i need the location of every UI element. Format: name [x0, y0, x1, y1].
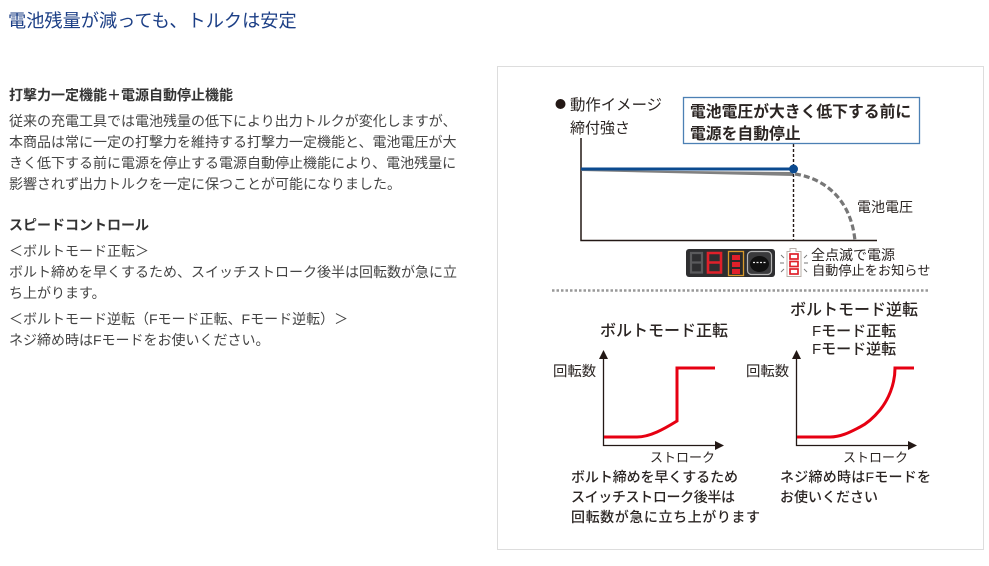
heading: ボルトモード逆転	[790, 301, 918, 319]
top chart: tightening force	[556, 96, 913, 241]
rpm curve	[604, 368, 715, 437]
text block: speed control description	[9, 243, 457, 348]
x label: ストローク	[843, 450, 908, 465]
legend heading: 動作イメージ	[570, 96, 662, 114]
dotted divider	[552, 289, 928, 292]
notice text: 自動停止をお知らせ	[812, 262, 930, 278]
digit lit	[708, 253, 721, 272]
caption: bolt mode forward: ボルト締めを早くするため	[571, 469, 738, 485]
mode button	[748, 252, 772, 274]
title: 電池残量が減っても、トルクは安定	[8, 11, 297, 31]
callout: auto power off: 電源を自動停止	[690, 125, 801, 143]
dashed voltage curve	[795, 174, 855, 241]
icon: tool display panel	[686, 249, 775, 277]
voltage label: 電池電圧	[857, 199, 913, 215]
y label: 回転数	[746, 363, 789, 380]
chart: bolt mode forward	[553, 322, 728, 465]
caption: reverse mode: お使いください	[780, 489, 878, 505]
text block: speed control description: ネジ締め時はFモードをお使いください。	[9, 332, 270, 348]
arrow up	[792, 350, 801, 359]
panel: diagrams	[497, 66, 984, 550]
notice text	[811, 247, 930, 278]
text block: impact force description: きく低下する前に電源を停止する電源自動停止機能により、電池残量に	[9, 155, 456, 171]
blue torque line	[581, 168, 793, 170]
text block: speed control description: ＜ボルトモード正転＞	[9, 243, 149, 259]
heading	[790, 301, 918, 358]
heading: Fモード逆転	[812, 341, 896, 358]
arrow right	[908, 441, 917, 450]
callout: auto power off: 電池電圧が大きく低下する前に	[690, 102, 911, 121]
text block: impact force description: 従来の充電工具では電池残量の低下により出力トルクが変化しますが、	[9, 113, 456, 129]
arrow right	[715, 441, 724, 450]
icon: flashing battery	[780, 248, 808, 276]
end point	[789, 164, 798, 174]
dotted vertical line	[792, 144, 794, 241]
axes	[796, 356, 909, 446]
text block: impact force description	[9, 113, 456, 192]
heading: impact force and auto stop: 打撃力一定機能＋電源自動停止機能	[9, 87, 233, 103]
text block: speed control description: ち上がります。	[9, 285, 106, 301]
heading: Fモード正転	[812, 323, 896, 340]
axes	[604, 356, 716, 446]
rpm curve	[797, 368, 914, 437]
y axis label: 締付強さ	[570, 120, 630, 137]
text block: impact force description: 本商品は常に一定の打撃力を維持する打撃力一定機能と、電池電圧が大	[9, 134, 456, 150]
caption: reverse mode: ネジ締め時はFモードを	[780, 469, 931, 485]
digit off	[691, 253, 702, 272]
text block: speed control description: ボルト締めを早くするため、スイッチストローク後半は回転数が急に立	[9, 264, 457, 280]
battery gauge	[728, 252, 744, 276]
heading: speed control: スピードコントロール	[9, 217, 149, 233]
y label: 回転数	[553, 363, 596, 380]
text block: speed control description: ＜ボルトモード逆転（Fモード正転、Fモード逆転）＞	[9, 311, 348, 327]
caption: reverse mode	[780, 469, 931, 505]
heading: ボルトモード正転	[600, 322, 728, 340]
notice text: 全点滅で電源	[811, 247, 895, 263]
caption: bolt mode forward: スイッチストローク後半は	[571, 489, 735, 505]
caption: bolt mode forward	[571, 469, 760, 525]
grey voltage line	[581, 170, 793, 176]
caption: bolt mode forward: 回転数が急に立ち上がります	[571, 509, 760, 525]
arrow up	[599, 350, 608, 359]
text block: impact force description: 影響されず出力トルクを一定に保つことが可能になりました。	[9, 176, 401, 192]
callout: auto power off	[684, 98, 920, 144]
chart: bolt mode reverse and F mode	[746, 301, 918, 465]
axes	[581, 138, 877, 240]
x label: ストローク	[650, 450, 715, 465]
